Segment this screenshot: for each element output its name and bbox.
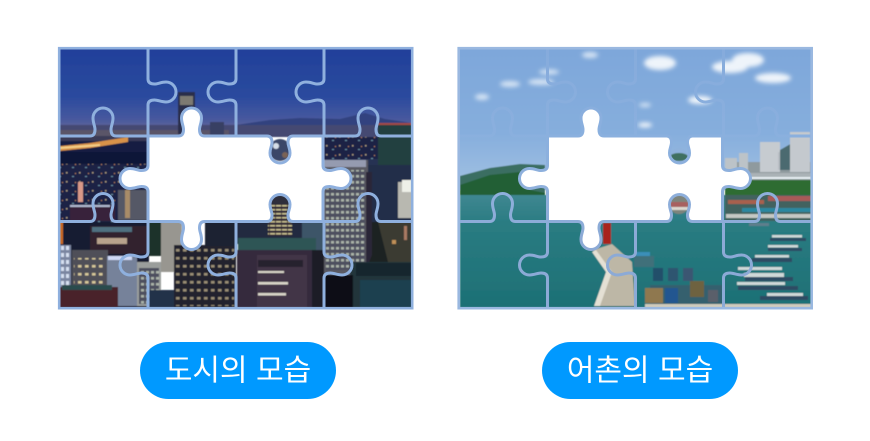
caption pill: city (140, 342, 336, 399)
white puzzle hole (520, 108, 750, 250)
puzzle seams (60, 48, 411, 307)
photo frame (459, 48, 812, 308)
caption pill: fishing village: 어촌의 모습 (567, 354, 713, 388)
panel: city puzzle photo (59, 48, 412, 308)
puzzle seams (460, 48, 810, 307)
white puzzle hole (120, 108, 351, 250)
panel: fishing village puzzle photo (459, 48, 813, 308)
caption pill: city: 도시의 모습 (165, 354, 311, 388)
photo frame (59, 48, 412, 308)
caption pill: fishing village (542, 342, 738, 399)
village harbour scene photo (459, 48, 813, 308)
city night scene photo (59, 48, 412, 308)
